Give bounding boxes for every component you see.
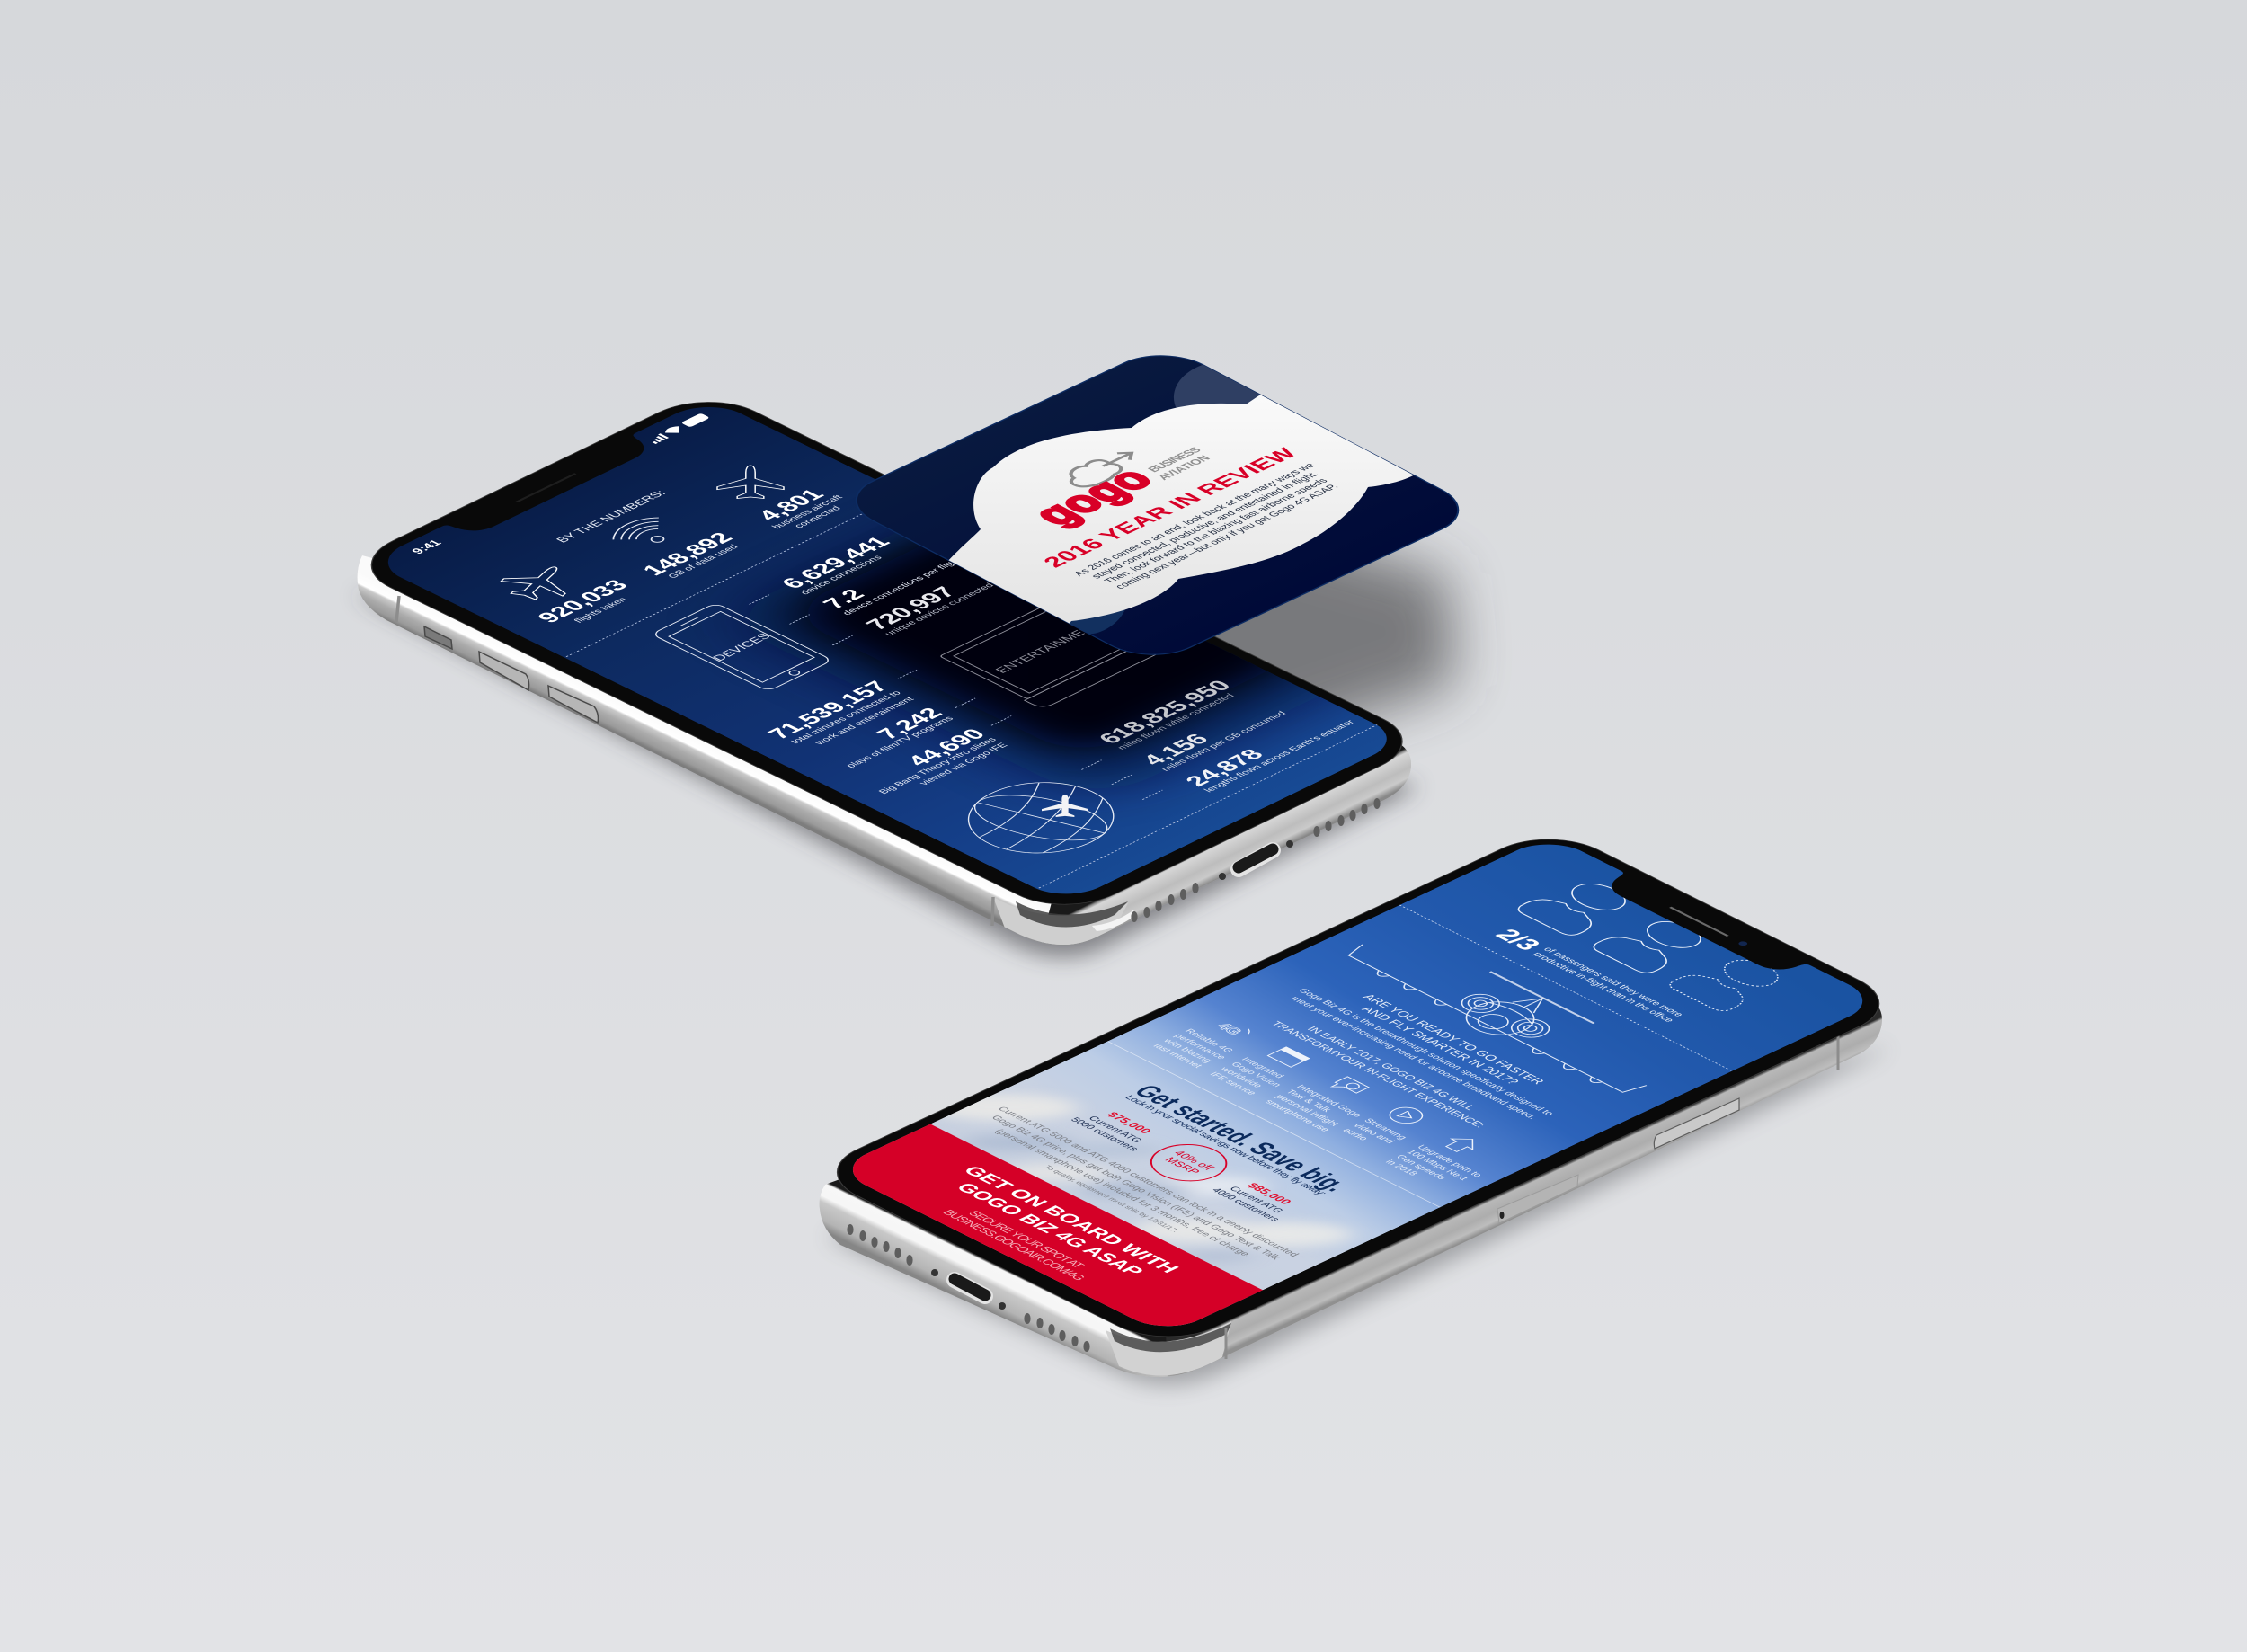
stat: intro slides: 44,690 <box>901 725 991 769</box>
stat: connections per flight: 7.2 <box>816 586 870 612</box>
stat: data used: 148,892 <box>636 529 739 579</box>
price: ATG 4000: 4000 customers <box>1209 1187 1283 1223</box>
card shadow on screen <box>733 525 1345 804</box>
stat: lengths flown: lengths flown across Earth's equator <box>1202 719 1357 794</box>
lock in subheading: Lock in your special savings now before they fly away: <box>1123 1094 1329 1197</box>
phone 2 screen <box>852 845 1862 1327</box>
feature: text and talk <box>1262 1084 1363 1133</box>
feature: upgrade: Upgrade path to <box>1415 1144 1484 1178</box>
feature: 4G: performance <box>1171 1033 1228 1061</box>
card paragraph: Then, look forward to the blazing fast airborne speeds <box>1103 477 1330 585</box>
feature: streaming <box>1340 1117 1408 1150</box>
stat: intro slides: viewed via Gogo IFE <box>918 742 1010 786</box>
discount badge <box>1136 1137 1242 1188</box>
price: ATG 5000: $75,000 <box>1104 1110 1155 1135</box>
stat: aircraft connected <box>747 483 856 536</box>
offer paragraph: Gogo Biz 4G price, plus get both Gogo Vision (IFE) and Gogo Text & Talk <box>989 1115 1283 1261</box>
stat: unique devices: unique devices connected <box>883 582 997 637</box>
feature: text and talk: Integrated Gogo <box>1293 1084 1363 1118</box>
card paragraph: As 2016 comes to an end, look back at the many ways we <box>1072 462 1318 578</box>
card content <box>964 406 1354 597</box>
intro paragraph: Gogo Biz 4G is the breakthrough solution specifically designed to <box>1296 987 1556 1117</box>
phone 2 speaker holes <box>847 1224 1090 1352</box>
stat: minutes connected: work and entertainment <box>812 696 917 747</box>
phone 1 side buttons <box>424 626 599 723</box>
front camera and speaker <box>517 474 575 502</box>
phone 1 black bezel <box>343 388 1430 918</box>
icon: entertainment laptop <box>937 591 1179 709</box>
stat: aircraft connected: connected <box>792 505 843 529</box>
sky background <box>833 835 1882 1336</box>
devices label: DEVICES <box>710 632 775 662</box>
globe plane icon <box>1042 795 1088 817</box>
two thirds stat: 2/3 <box>1488 926 1547 954</box>
price: ATG 4000: $85,000 <box>1244 1181 1295 1206</box>
stat: lengths flown: 24,878 <box>1179 746 1269 789</box>
phone 1 metal body <box>358 555 1411 945</box>
stat: unique devices: 720,997 <box>859 583 962 633</box>
dividers <box>1399 905 1732 1071</box>
feature: upgrade: 100 Mbps Next <box>1404 1149 1470 1182</box>
business aviation: AVIATION <box>1154 453 1213 482</box>
phone 1 charging port <box>1239 850 1273 869</box>
card paragraph: coming next year—but only if you get Gogo 4G ASAP. <box>1114 483 1341 591</box>
by the numbers heading: BY THE NUMBERS: <box>554 489 669 545</box>
icon: play <box>1383 1105 1429 1126</box>
icon: globe <box>943 771 1140 865</box>
card body <box>833 344 1481 666</box>
stat: aircraft connected: 4,801 <box>751 486 830 524</box>
phone 2 body seams <box>1226 1036 1838 1359</box>
price: ATG 5000: 5000 customers <box>1068 1116 1141 1152</box>
feature: 4G: Reliable 4G <box>1182 1028 1235 1054</box>
phone 2 cast shadow <box>825 1047 1892 1385</box>
ready to go faster heading: AND FLY SMARTER IN 2017? <box>1359 1005 1522 1086</box>
stat: minutes connected: 71,539,157 <box>761 678 894 742</box>
feature: 4G <box>1150 1027 1239 1070</box>
gogo logo wordmark: gogo <box>1020 461 1164 531</box>
stat: plays of film: plays of film/TV programs <box>844 715 956 769</box>
stat: aircraft connected: business aircraft <box>769 494 845 530</box>
clouds <box>940 1089 1358 1264</box>
phone 1 body seams <box>396 596 993 926</box>
offer paragraph: Current ATG 5000 and ATG 4000 customers can lock in a deeply discounted <box>995 1106 1301 1258</box>
feature: upgrade <box>1382 1144 1484 1194</box>
phone 2 sim tray <box>1497 1175 1578 1223</box>
ready to go faster heading: ARE YOU READY TO GO FASTER <box>1360 992 1548 1086</box>
phone 2 black bezel <box>809 826 1907 1350</box>
phone 2 side button <box>1654 1098 1739 1149</box>
icon: 4G <box>1213 1020 1254 1040</box>
feature: text and talk: smartphone use <box>1262 1098 1331 1133</box>
phone 2: get started <box>820 839 1882 1396</box>
stat: connections per flight: device connections per flight <box>840 557 964 617</box>
divider one <box>566 493 1377 888</box>
stat: data used: GB of data used <box>666 544 741 580</box>
transform heading: TRANSFORMYOUR IN-FLIGHT EXPERIENCE: <box>1268 1020 1488 1129</box>
icon: wifi <box>604 513 685 552</box>
icon: 4G: 4G <box>1213 1021 1246 1037</box>
call to action heading: GOGO BIZ 4G ASAP <box>951 1180 1149 1278</box>
intro paragraph: meet your ever-increasing need for airborne broadband speed. <box>1288 995 1539 1121</box>
stat: unique devices <box>859 571 997 637</box>
feature: text and talk: personal inflight <box>1273 1094 1341 1127</box>
discount badge: 40% off <box>1171 1150 1217 1172</box>
stat: plays of film <box>822 704 956 769</box>
stat: intro slides: Big Bang Theory intro slides <box>876 736 999 795</box>
feature: vision: IFE service <box>1207 1071 1258 1097</box>
feature: upgrade: Gen speeds <box>1393 1154 1448 1181</box>
price: ATG 5000 <box>1068 1105 1168 1152</box>
icon: clapperboard <box>1267 1047 1310 1067</box>
discount badge: MSRP <box>1162 1156 1203 1176</box>
status icons <box>646 413 710 444</box>
gogo cloud icon <box>1059 448 1148 491</box>
two thirds stat <box>1496 929 1682 1022</box>
stat: miles flown: 618,825,950 <box>1092 677 1237 747</box>
offer paragraph: (personal smartphone use) included for 3 months, free of charge. <box>992 1128 1255 1258</box>
stat: device connections: 6,629,441 <box>776 533 896 591</box>
transform heading: IN EARLY 2017, GOGO BIZ 4G WILL <box>1304 1025 1479 1112</box>
price: ATG 5000: Current ATG <box>1086 1115 1144 1144</box>
phone 2 metal body <box>820 1008 1882 1377</box>
notch speaker <box>1670 907 1727 936</box>
phone 1 screen <box>388 407 1387 893</box>
feature: streaming: audio <box>1340 1127 1370 1142</box>
stat: miles flown: miles flown while connected <box>1115 692 1237 751</box>
feature: 4G: with blazing <box>1160 1037 1214 1064</box>
stat: plays of film: 7,242 <box>870 705 948 742</box>
card shadow on background <box>1124 503 1456 773</box>
stat: device connections: device connections <box>798 554 885 596</box>
feature: streaming: video and <box>1351 1123 1396 1145</box>
price: ATG 4000 <box>1209 1175 1308 1223</box>
icon: upgrade arrow <box>1441 1134 1483 1154</box>
two thirds stat: productive in-flight than in the office <box>1530 951 1676 1024</box>
notch camera <box>1736 940 1749 946</box>
two thirds stat: of passengers said they were more <box>1541 946 1685 1018</box>
business aviation: BUSINESS <box>1144 445 1204 474</box>
stat: miles per GB: 4,156 <box>1136 731 1214 768</box>
business aviation <box>1141 445 1217 482</box>
feature: upgrade: in 2018 <box>1382 1159 1419 1177</box>
card paragraph: stayed connected, productive, and entertained in-flight. <box>1089 471 1321 581</box>
card cloud shapes <box>948 365 1414 635</box>
stat: flights taken: flights taken <box>572 596 630 624</box>
dashes: devices <box>747 595 1165 800</box>
status time: 9:41 <box>409 538 445 556</box>
phone 2 sim hole <box>1499 1212 1505 1219</box>
feature: text and talk: Text & Talk <box>1283 1088 1333 1114</box>
card title: 2016 YEAR IN REVIEW <box>1038 445 1303 571</box>
feature: 4G: fast Internet <box>1150 1043 1203 1070</box>
feature: vision: Gogo Vision <box>1229 1061 1283 1088</box>
stat: minutes connected: total minutes connected to <box>788 689 903 745</box>
call to action link: SECURE YOUR SPOT AT <box>965 1209 1088 1270</box>
red call to action band <box>833 1124 1263 1336</box>
screen background <box>369 397 1407 903</box>
feature: vision: worldwide <box>1217 1066 1264 1089</box>
phone 1: by the numbers <box>358 402 1421 971</box>
get started heading: Get started. Save big. <box>1127 1081 1356 1195</box>
people icons <box>1517 884 1779 1011</box>
phone 1 cast shadow <box>352 593 1420 957</box>
airplane front view <box>1348 944 1647 1093</box>
stat: flights taken: 920,033 <box>531 576 634 626</box>
price: ATG 4000: Current ATG <box>1227 1186 1285 1214</box>
offer paragraph: To qualify, equipment must ship by 12/31/17. <box>1043 1165 1180 1233</box>
phone 1 speaker holes <box>1131 798 1381 922</box>
call to action link: BUSINESS.GOGOAIR.COM/4G <box>940 1208 1088 1282</box>
card: year in review <box>857 355 1460 655</box>
stat: intro slides <box>855 725 1011 801</box>
feature: streaming: Streaming <box>1362 1117 1408 1141</box>
phone 2 charging port <box>955 1280 985 1296</box>
entertainment label: ENTERTAINMENT <box>993 621 1105 675</box>
icon: departing plane <box>493 560 586 604</box>
feature: vision: Integrated <box>1239 1056 1286 1079</box>
feature: vision <box>1206 1056 1293 1098</box>
icon: chat bubble <box>1329 1077 1369 1096</box>
top plane icon <box>717 466 784 498</box>
icon: devices tablet <box>652 603 832 691</box>
call to action heading: GET ON BOARD WITH <box>958 1163 1185 1275</box>
stat: miles per GB: miles flown per GB consumed <box>1159 710 1289 773</box>
